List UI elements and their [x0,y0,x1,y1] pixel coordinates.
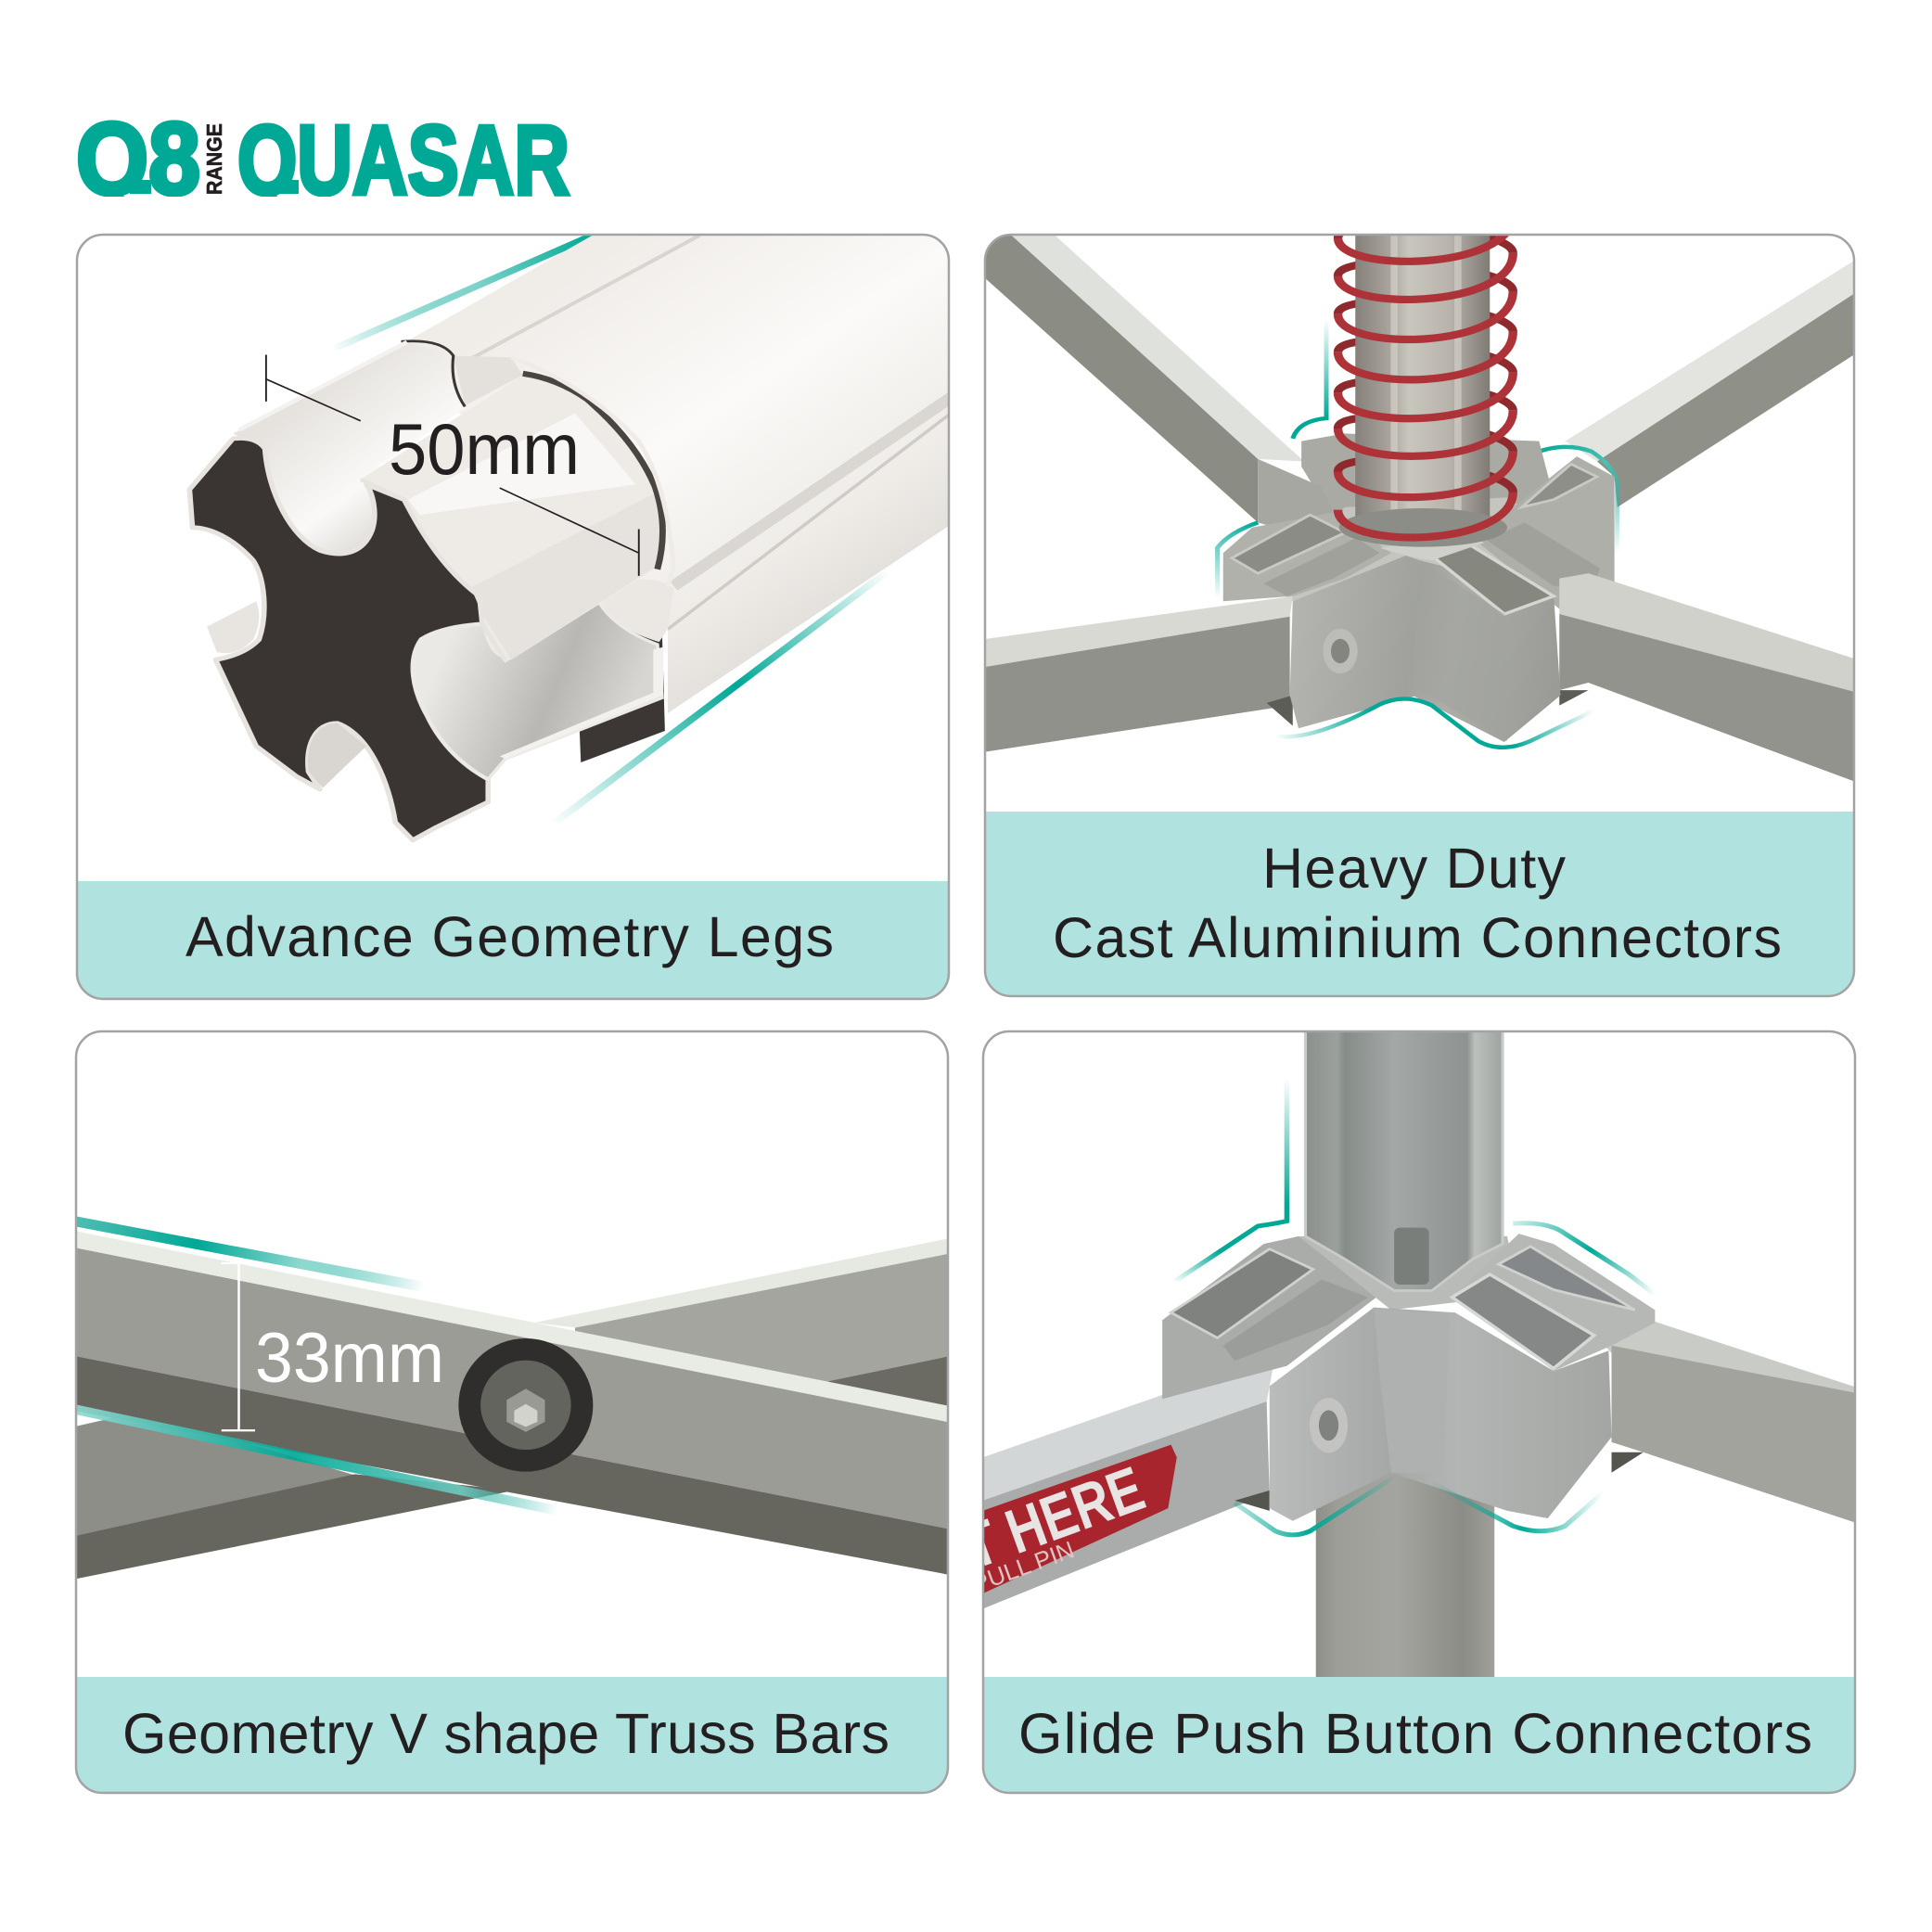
dimension label: 33mm: 33mm [255,1319,444,1398]
panel: glide push button connectors [954,1030,1861,1793]
caption band [76,1677,948,1793]
caption text [1053,837,1782,969]
panel: cast aluminium connectors [982,215,1858,996]
photo: push button connector [954,1030,1861,1686]
photo: connector with red spring [982,215,1858,783]
caption band [77,881,949,999]
caption band [985,812,1854,996]
caption text: Geometry V shape Truss Bars [122,1702,889,1765]
panel: advance geometry legs [77,235,957,999]
logo word QUASAR: QUASAR [237,106,569,215]
spring and pole [1337,215,1513,547]
dimension line: 50mm [266,354,639,576]
caption text: Glide Push Button Connectors [1018,1702,1812,1765]
panel: v shape truss bars [73,1031,952,1793]
upper pole [1306,1030,1503,1291]
photo: aluminium leg profile [189,236,957,840]
label: red sticker [982,1445,1177,1593]
logo mark Q8: Q8 [76,102,200,216]
caption text: Advance Geometry Legs [186,905,834,968]
logo word RANGE: RANGE [202,123,226,195]
caption band [983,1677,1855,1793]
sticker text HERE: T HERE [954,1453,1153,1582]
sticker text PULL PIN: PULL PIN [968,1535,1078,1598]
dimension line: 33mm [222,1263,256,1430]
bolt and washer [458,1338,593,1472]
teal outline bottom [1275,698,1594,748]
dimension label: 50mm: 50mm [389,408,580,490]
caption line 2: Cast Aluminium Connectors [1053,906,1782,969]
push button pin [1394,1228,1429,1285]
caption line 1: Heavy Duty [1262,837,1566,900]
logo: Q8 Range Quasar [78,120,571,197]
screw [1323,629,1358,673]
screw [1310,1398,1348,1452]
photo: crossing truss bars with bolt [73,1221,952,1580]
